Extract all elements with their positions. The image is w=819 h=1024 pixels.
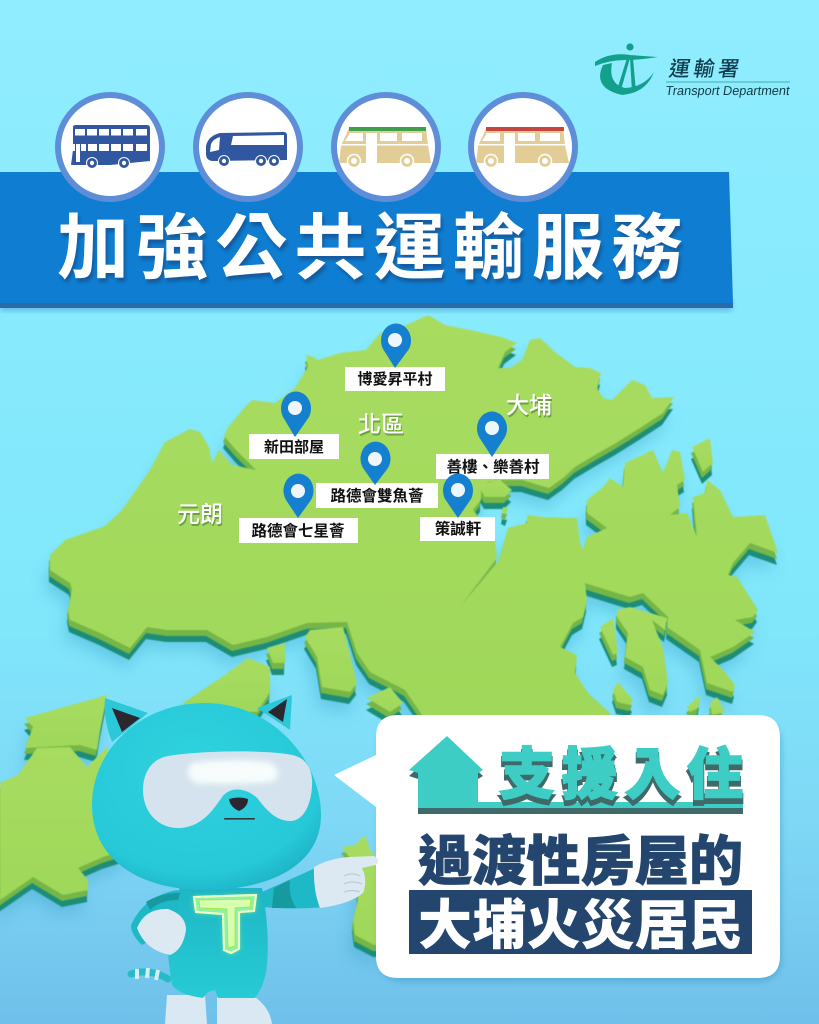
label: 新田部屋: 新田部屋 <box>264 438 324 456</box>
pin: 策誠軒 <box>443 474 473 518</box>
label: 路德會雙魚薈 <box>316 483 438 508</box>
map base extrusion <box>0 327 777 957</box>
bubble shape <box>334 715 780 978</box>
ear left <box>105 698 148 742</box>
label: 新田部屋 <box>249 434 339 459</box>
right arm <box>262 866 326 908</box>
region label: 元朗: 元朗 <box>177 501 223 527</box>
map side extrusion <box>0 321 777 951</box>
ear right <box>257 695 292 730</box>
body <box>168 888 268 998</box>
region label: 北區: 北區 <box>358 411 404 437</box>
icon: green minibus <box>331 92 441 202</box>
pointing hand <box>314 856 378 908</box>
logo Chinese name: 運輸署 <box>667 57 741 81</box>
region label: 元朗: 元朗 <box>178 503 224 529</box>
T glow on chest <box>193 895 257 954</box>
left hand <box>137 909 186 955</box>
left arm <box>131 890 178 945</box>
tail <box>131 968 168 980</box>
icon: red minibus <box>468 92 578 202</box>
nose <box>229 798 248 811</box>
header banner <box>0 172 733 311</box>
map of Hong Kong <box>0 315 778 965</box>
pin: 善樓、樂善村 <box>477 412 507 457</box>
heading: 過渡性房屋的: 過渡性房屋的 <box>418 832 743 892</box>
callout bubble <box>334 715 782 982</box>
label: 路德會雙魚薈: 路德會雙魚薈 <box>330 486 424 505</box>
label: 善樓、樂善村: 善樓、樂善村 <box>446 457 540 476</box>
label: 路德會七星薈: 路德會七星薈 <box>251 521 345 540</box>
left sleeve stripe <box>146 893 180 910</box>
region label: 北區: 北區 <box>359 413 405 439</box>
subheading: 支援入住: 支援入住 <box>499 743 743 806</box>
label: 博愛昇平村 <box>345 367 445 391</box>
mascot <box>92 695 378 1024</box>
label: 善樓、樂善村 <box>436 454 549 479</box>
region label: 大埔: 大埔 <box>507 394 553 420</box>
goggles <box>143 751 312 828</box>
head <box>92 703 321 890</box>
logo: Transport Department <box>595 43 791 98</box>
pin: 路德會雙魚薈 <box>360 442 391 485</box>
title: 加強公共運輸服務 <box>57 209 683 289</box>
map shadow <box>0 335 774 965</box>
banner shadow <box>0 300 732 311</box>
icon: coach <box>193 92 303 202</box>
title: 加強公共運輸服務 <box>59 213 685 293</box>
banner face <box>0 172 733 303</box>
icon: double-decker bus <box>55 92 165 202</box>
banner side <box>0 303 733 308</box>
subheading: 支援入住: 支援入住 <box>499 748 743 811</box>
pin: 路德會七星薈 <box>284 474 314 518</box>
pin: 新田部屋 <box>281 392 311 437</box>
label: 路德會七星薈 <box>239 518 358 543</box>
label: 策誠軒: 策誠軒 <box>435 519 482 538</box>
feet <box>165 995 272 1024</box>
mouth <box>224 818 255 820</box>
logo English name: Transport Department <box>665 83 791 98</box>
icon: house with underline <box>409 736 743 814</box>
pin: 博愛昇平村 <box>381 324 411 368</box>
label: 策誠軒 <box>420 517 495 541</box>
heading: 大埔火災居民: 大埔火災居民 <box>418 896 743 956</box>
logo emblem <box>595 43 658 95</box>
region label: 大埔: 大埔 <box>506 392 552 418</box>
sleeve stripe <box>272 880 296 908</box>
label: 博愛昇平村: 博愛昇平村 <box>357 370 433 388</box>
map top surface <box>0 315 778 945</box>
bubble shadow <box>378 720 782 982</box>
